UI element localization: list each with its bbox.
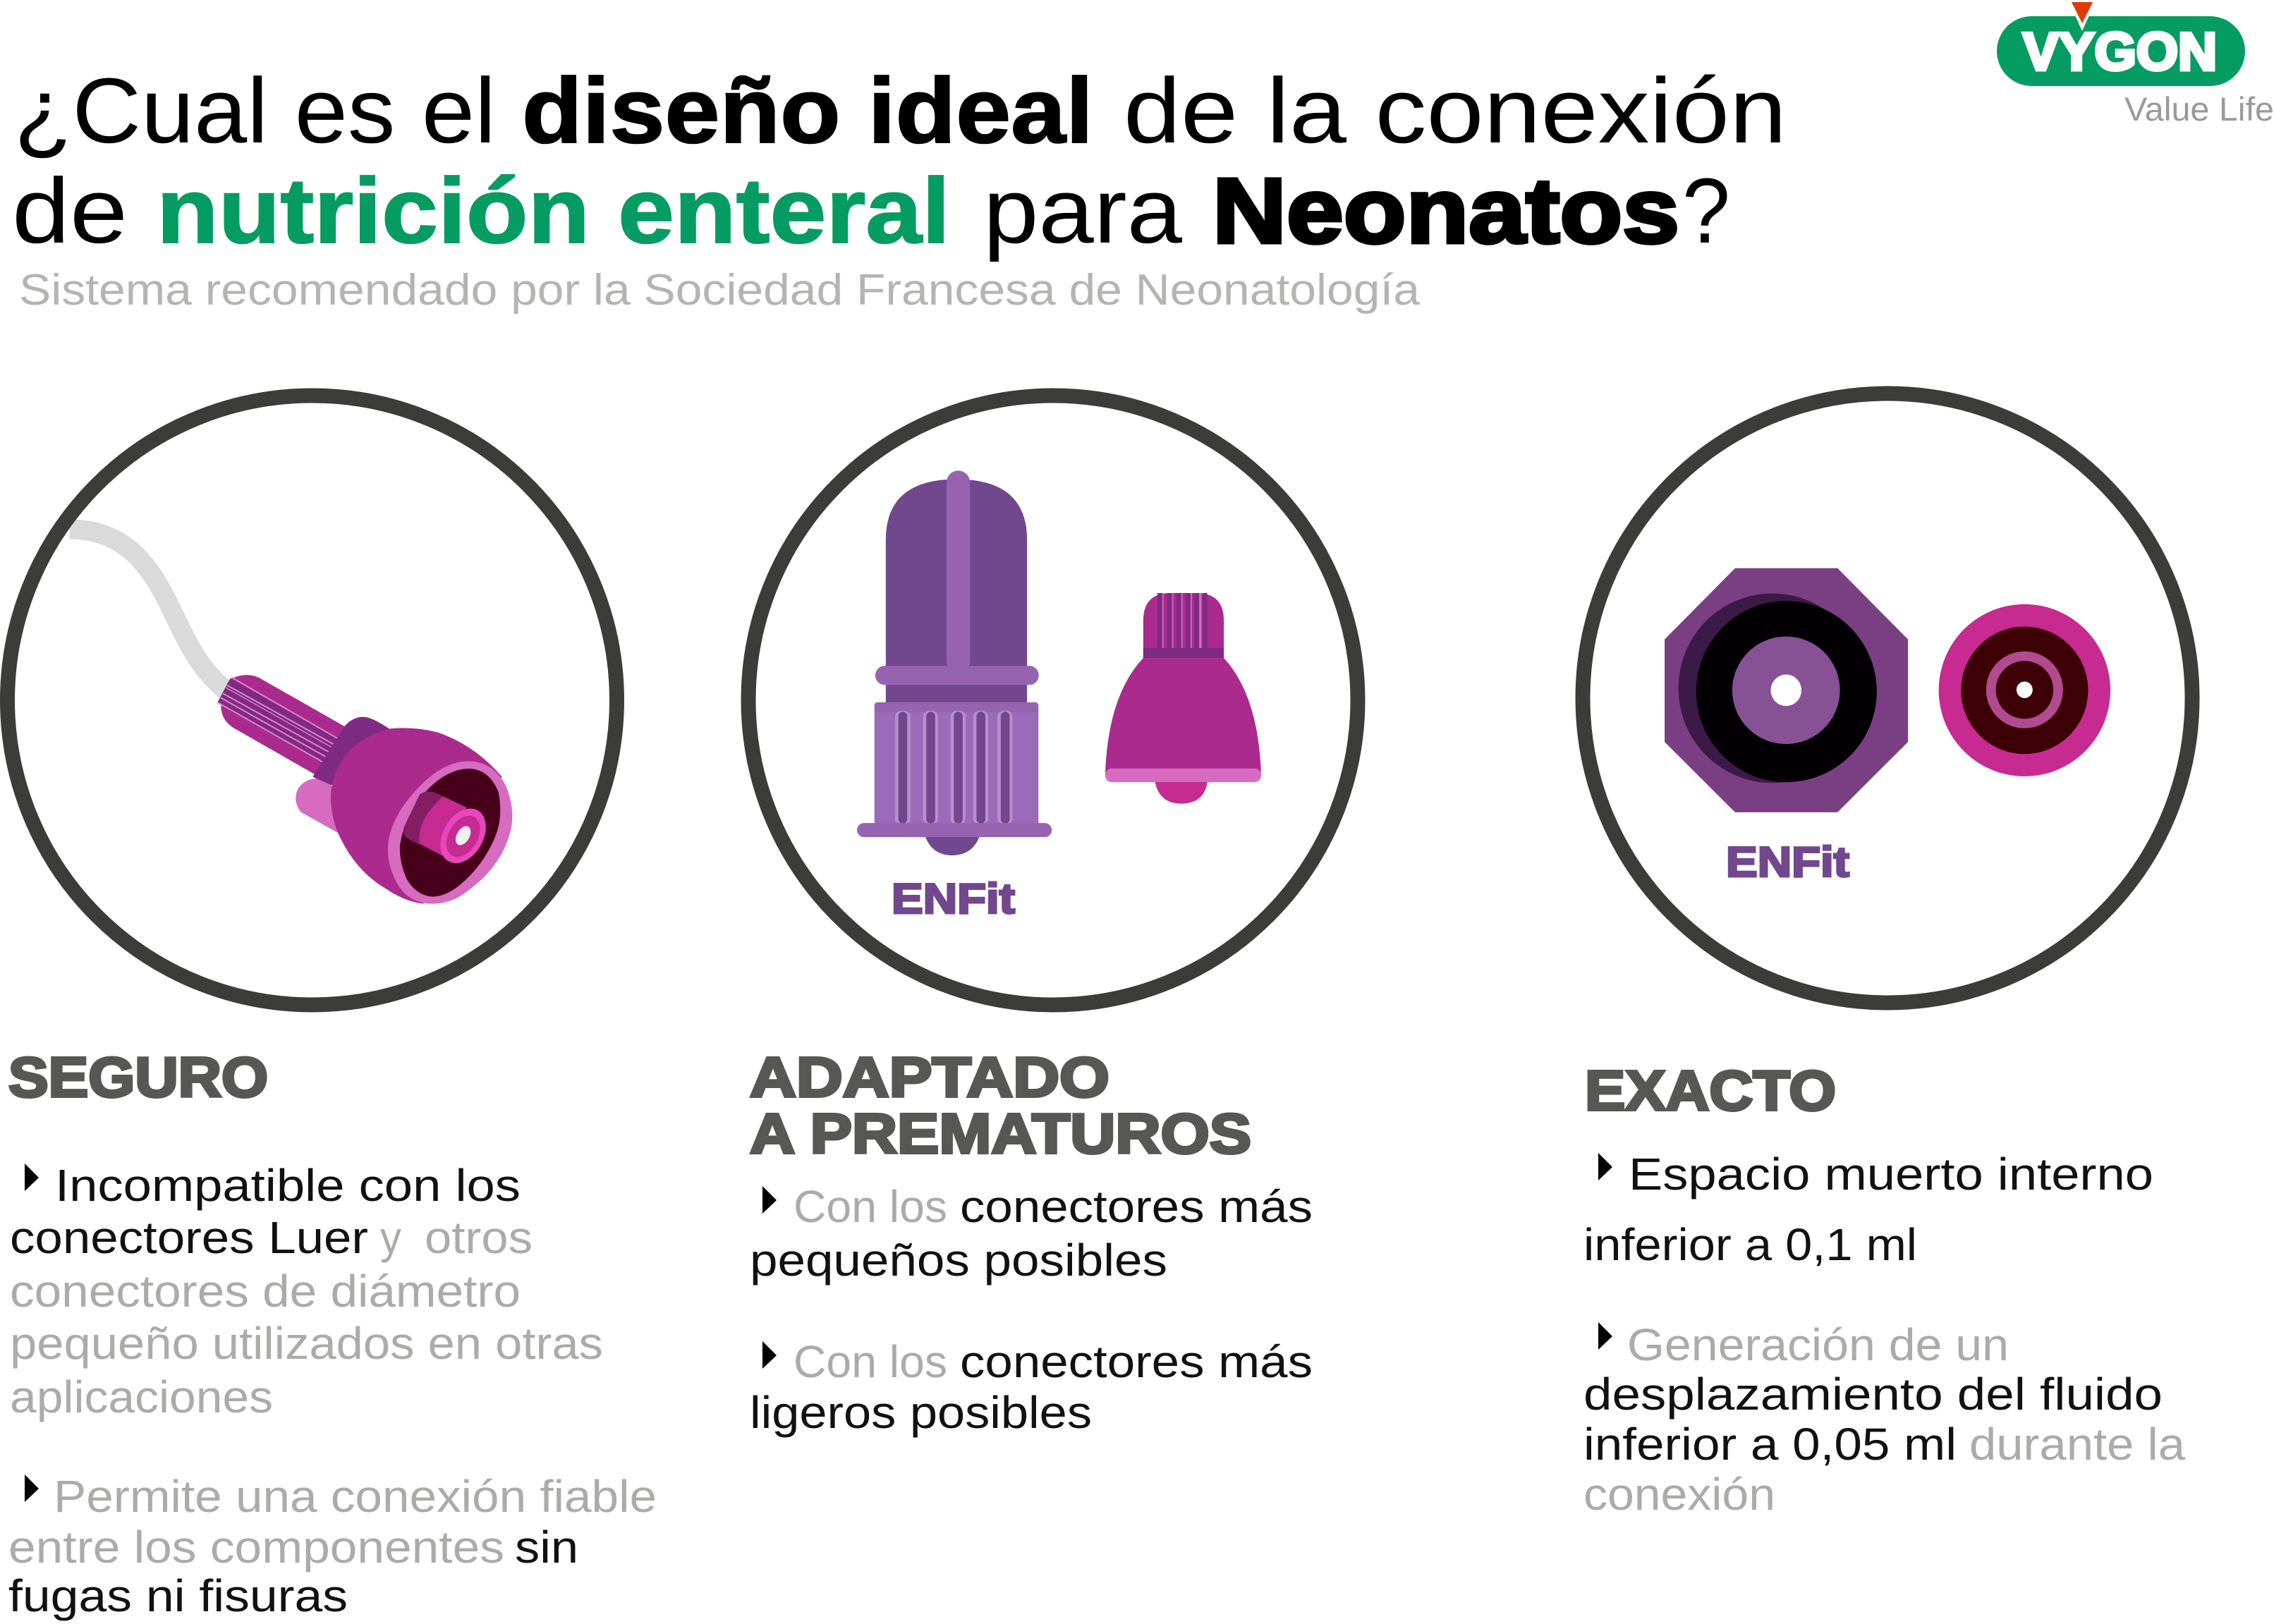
title: ¿Cual es el — [14, 59, 496, 162]
text block: exacto bullet 2: inferior a 0,05 ml — [1583, 1419, 1957, 1470]
title: de — [12, 159, 128, 262]
text block: adaptado bullet 2: ligeros posibles — [750, 1387, 1092, 1438]
text block: exacto bullet 2: Generación de un — [1627, 1319, 2009, 1370]
title: diseño ideal — [522, 59, 1093, 162]
heading: seguro: SEGURO — [8, 1046, 268, 1109]
title — [12, 59, 1787, 262]
text block: adaptado bullet 2: Con los — [794, 1336, 947, 1387]
title: para — [983, 159, 1182, 262]
heading: adaptado a prematuros — [750, 1046, 1251, 1165]
label: ENFit: ENFit — [1726, 838, 1849, 886]
label: ENFit: ENFit — [892, 875, 1015, 922]
text block: seguro bullet 2: Permite una conexión fiable — [54, 1471, 657, 1522]
icon: ENFit connectors side view — [748, 396, 1358, 1005]
text block: seguro bullet 2: entre los componentes — [8, 1522, 504, 1573]
text block: seguro bullet 1: pequeño utilizados en otras — [10, 1318, 603, 1369]
text block: seguro bullet 1: otros — [425, 1212, 533, 1263]
title: ? — [1682, 159, 1730, 262]
text block: seguro bullet 2 — [8, 1471, 657, 1621]
panel: seguro — [7, 396, 657, 1621]
logo: Vygon — [1997, 1, 2274, 128]
text block: adaptado bullet 2: conectores más — [960, 1336, 1313, 1387]
text block: exacto bullet 2: desplazamiento del fluido — [1583, 1369, 2163, 1420]
text block: exacto bullet 2: durante la — [1969, 1419, 2185, 1470]
panel: exacto — [1583, 393, 2192, 1520]
text block: adaptado bullet 2 — [750, 1336, 1313, 1438]
panel: adaptado a prematuros — [748, 396, 1358, 1438]
text block: adaptado bullet 1 — [750, 1181, 1313, 1286]
text block: seguro bullet 1: conectores de diámetro — [10, 1266, 521, 1317]
text block: exacto bullet 2 — [1583, 1319, 2185, 1520]
text block: adaptado bullet 1: pequeños posibles — [750, 1235, 1167, 1286]
text block: seguro bullet 1: conectores Luer — [10, 1212, 368, 1263]
text block: exacto bullet 1: inferior a 0,1 ml — [1583, 1219, 1917, 1270]
icon: ENFit connectors front view — [1583, 393, 2192, 1003]
logo: Vygon: VYGON — [2023, 22, 2217, 81]
text block: seguro bullet 1: aplicaciones — [10, 1372, 273, 1422]
title: Neonatos — [1212, 159, 1679, 262]
heading: adaptado a prematuros: A PREMATUROS — [750, 1102, 1251, 1165]
text block: seguro bullet 1 — [10, 1160, 603, 1422]
title: nutrición enteral — [157, 159, 950, 262]
text block: seguro bullet 2: sin — [515, 1522, 578, 1573]
text block: exacto bullet 1: Espacio muerto interno — [1629, 1149, 2153, 1199]
subtitle: Sistema recomendado por la Sociedad Francesa de Neonatología — [19, 266, 1421, 315]
text block: exacto bullet 1 — [1583, 1149, 2153, 1270]
icon: connector with tube — [7, 396, 616, 1005]
heading: adaptado a prematuros: ADAPTADO — [750, 1046, 1109, 1109]
title: de la conexión — [1124, 59, 1787, 162]
text block: adaptado bullet 1: conectores más — [960, 1181, 1313, 1232]
text block: seguro bullet 1: Incompatible con los — [55, 1160, 521, 1211]
logo: Vygon: Value Life — [2124, 90, 2274, 128]
text block: seguro bullet 1: y — [380, 1212, 401, 1263]
text block: seguro bullet 2: fugas ni fisuras — [8, 1570, 348, 1621]
heading: exacto: EXACTO — [1585, 1059, 1836, 1122]
text block: adaptado bullet 1: Con los — [794, 1181, 947, 1232]
text block: exacto bullet 2: conexión — [1583, 1469, 1775, 1520]
